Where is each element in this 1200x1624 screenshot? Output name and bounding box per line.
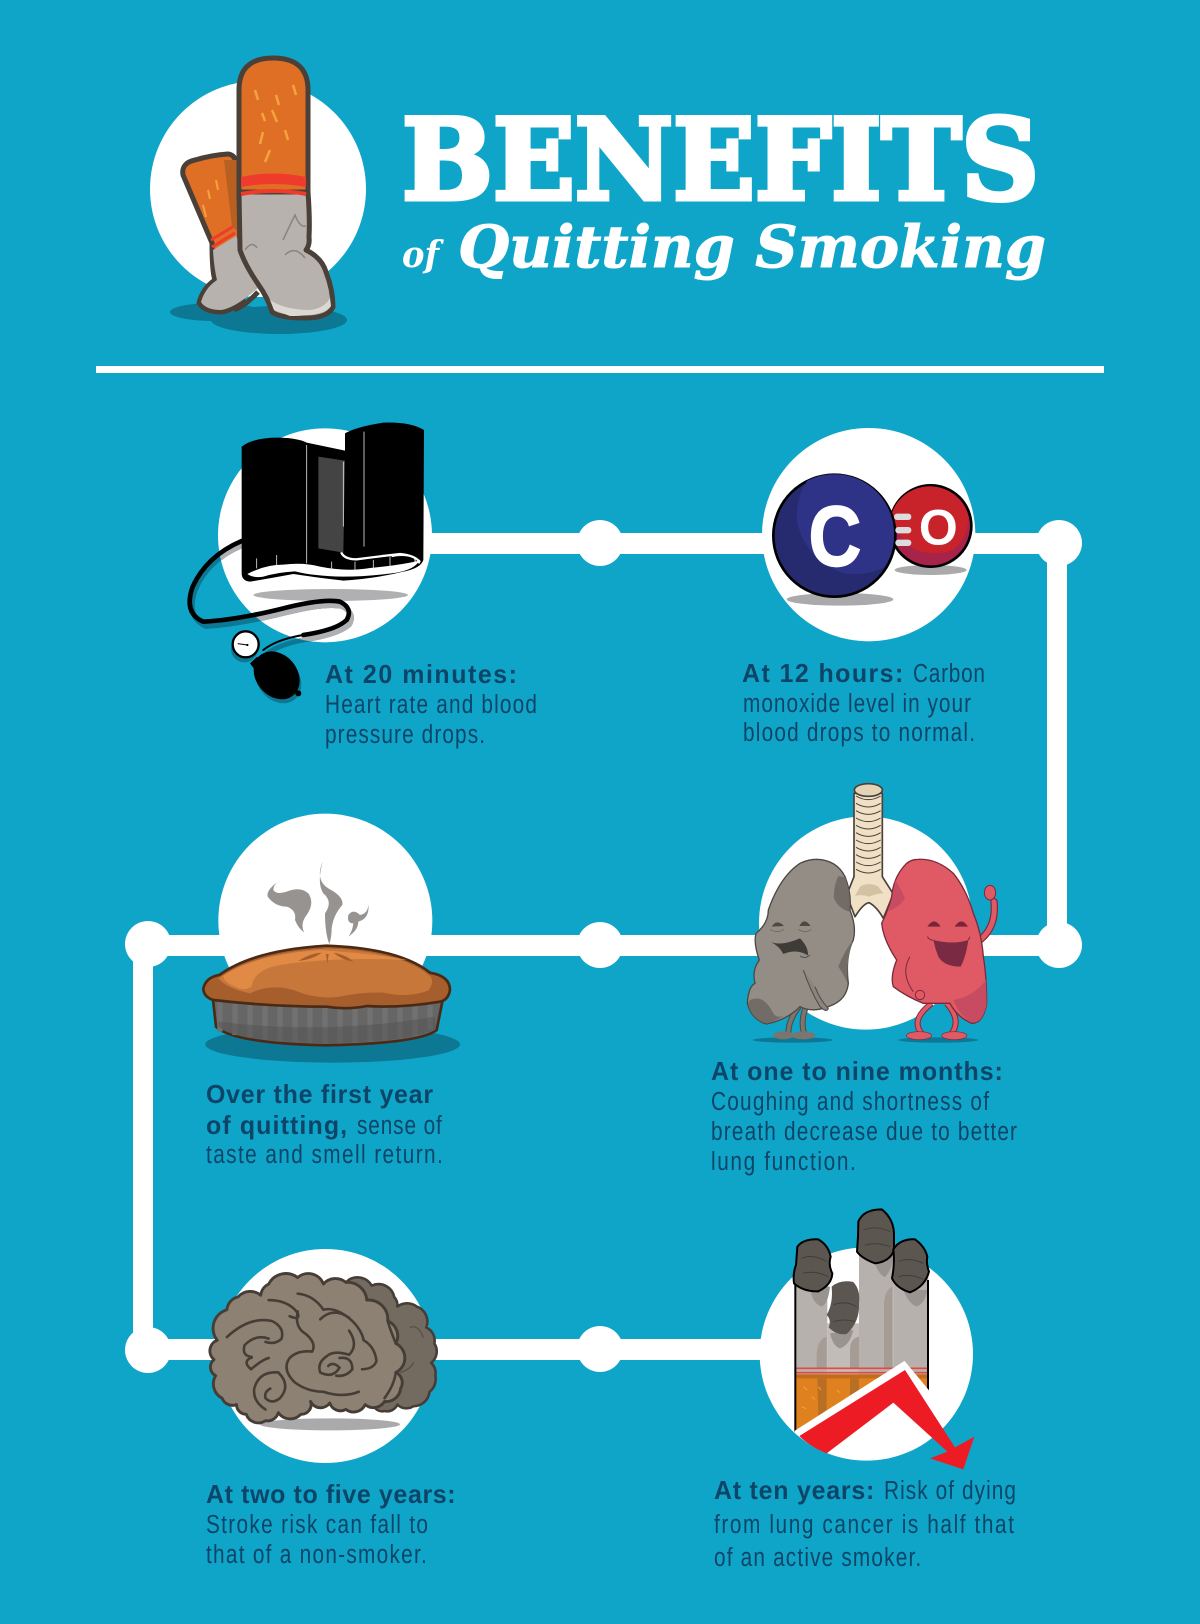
pie crust <box>203 946 450 1008</box>
text: at 20 minutes: At 20 minutes: <box>325 661 517 689</box>
icon: pie with steam <box>203 814 460 1063</box>
text: at 12 hours <box>742 659 985 747</box>
header icon: two stubbed-out cigarettes <box>150 58 366 334</box>
subtitle: Quitting Smoking: Quitting Smoking <box>458 213 1046 281</box>
text: over the first year: taste and smell return. <box>206 1140 443 1169</box>
text: at 12 hours: blood drops to normal. <box>743 718 975 747</box>
healthy lung character <box>882 859 996 1040</box>
subtitle: of: of <box>402 234 444 276</box>
trachea <box>847 784 893 918</box>
text: over the first year: of quitting, <box>206 1112 347 1140</box>
text: at 12 hours: Carbon <box>913 659 985 688</box>
icon: blood pressure cuff <box>190 423 432 713</box>
text: at 12 hours: At 12 hours: <box>742 660 903 688</box>
cigarettes <box>795 1250 928 1437</box>
text: at 20 minutes: pressure drops. <box>325 720 485 749</box>
icon: carbon monoxide molecule: C <box>809 490 861 585</box>
text: at 20 minutes: Heart rate and blood <box>325 690 537 719</box>
text: over the first year: sense of <box>357 1111 442 1140</box>
pie tin <box>213 997 443 1045</box>
text: at two to five years: Stroke risk can fall to <box>206 1510 428 1539</box>
falling red arrow <box>796 1364 974 1469</box>
title <box>402 96 1046 281</box>
text: at ten years: Risk of dying <box>884 1476 1016 1505</box>
text: at 12 hours: monoxide level in your <box>743 689 971 718</box>
text: at 20 minutes <box>325 661 537 749</box>
cigarette ash <box>794 1209 929 1292</box>
text: at two to five years <box>206 1481 456 1569</box>
text: at ten years: from lung cancer is half that <box>714 1510 1014 1539</box>
text: at one to nine months <box>711 1058 1017 1176</box>
icon: carbon monoxide molecule <box>762 428 975 641</box>
divider <box>96 366 1104 373</box>
brain back lobe <box>346 1277 437 1411</box>
text: at ten years: of an active smoker. <box>714 1543 921 1572</box>
text: over the first year: Over the first year <box>206 1081 433 1109</box>
text: at ten years <box>714 1476 1016 1572</box>
text: at one to nine months: lung function. <box>711 1147 856 1176</box>
brain front lobe <box>210 1274 423 1423</box>
text: at one to nine months: breath decrease due to better <box>711 1117 1017 1146</box>
text: at ten years: At ten years: <box>714 1477 874 1505</box>
title: BENEFITS: BENEFITS <box>402 96 1039 226</box>
icon: gray and healthy lungs <box>747 784 996 1043</box>
text: at one to nine months: At one to nine months: <box>711 1058 1003 1086</box>
icon: carbon monoxide molecule: O <box>919 499 958 555</box>
gray lung character <box>747 859 854 1039</box>
icon: smoky brain <box>210 1249 437 1463</box>
text: over the first year <box>206 1081 443 1169</box>
icon: burnt-down cigarettes with falling arrow <box>760 1209 974 1469</box>
text: at two to five years: that of a non-smoker. <box>206 1540 427 1569</box>
text: at one to nine months: Coughing and shortness of <box>711 1087 989 1116</box>
timeline path <box>125 520 1082 1373</box>
text: at two to five years: At two to five years: <box>206 1481 456 1509</box>
steam <box>267 862 369 944</box>
